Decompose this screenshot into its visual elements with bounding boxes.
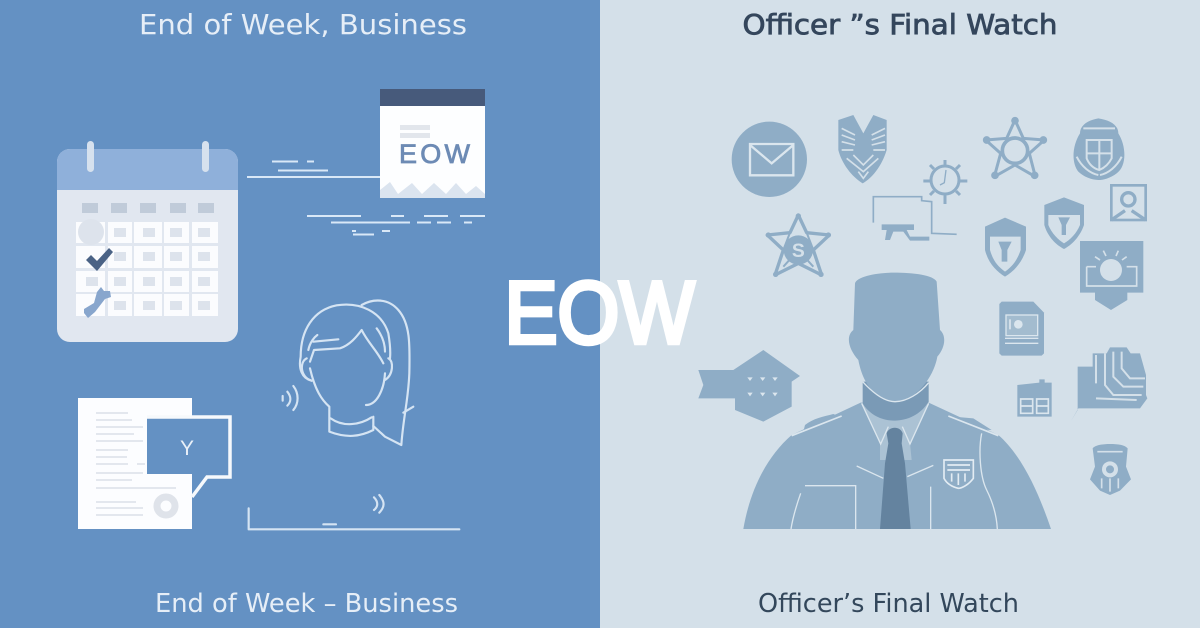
icon: house tag (698, 350, 800, 422)
icon: sun sign (1080, 241, 1143, 310)
icon: person line drawing (249, 300, 459, 529)
heading: end of week: End of Week, Business (139, 8, 467, 41)
caption: business: End of Week – Business (155, 589, 458, 619)
panel: business background (0, 0, 600, 628)
icon: dollar star: S (792, 241, 805, 262)
figure: officer silhouette (743, 273, 1051, 529)
icon: envelope circle (732, 122, 807, 197)
icon: floppy document (999, 302, 1044, 356)
icon group: badges and symbols (732, 115, 1146, 310)
panel: officer background (600, 0, 1200, 628)
icon: police shield small (1090, 444, 1131, 495)
icon: sheriff star (984, 118, 1046, 178)
document: EOW card (380, 89, 485, 198)
center title: EOW: EOW (504, 263, 694, 362)
heading: officer final watch: Officer ”s Final Watch (742, 8, 1058, 41)
icon: police badge small (1044, 197, 1084, 249)
document with speech bubble: Y (180, 437, 194, 460)
icon: monitor (873, 197, 957, 241)
icon: police badge large (985, 218, 1026, 277)
icon: eagle shield (838, 115, 887, 183)
icon: calendar (57, 141, 238, 342)
icon: small calendar (1017, 379, 1052, 417)
icon: dollar star (766, 213, 831, 277)
document: EOW card: EOW (399, 139, 471, 169)
document with speech bubble (78, 398, 230, 529)
icon: crest shield (1074, 118, 1124, 180)
icon: map speech tag (1071, 347, 1147, 421)
icon: chest badge (944, 460, 973, 488)
caption: officer: Officer’s Final Watch (758, 589, 1019, 619)
icon: clock gear (923, 160, 967, 204)
connector lines (247, 162, 485, 234)
icon group: lower symbols (698, 302, 1147, 495)
icon: portrait frame (1111, 185, 1146, 220)
